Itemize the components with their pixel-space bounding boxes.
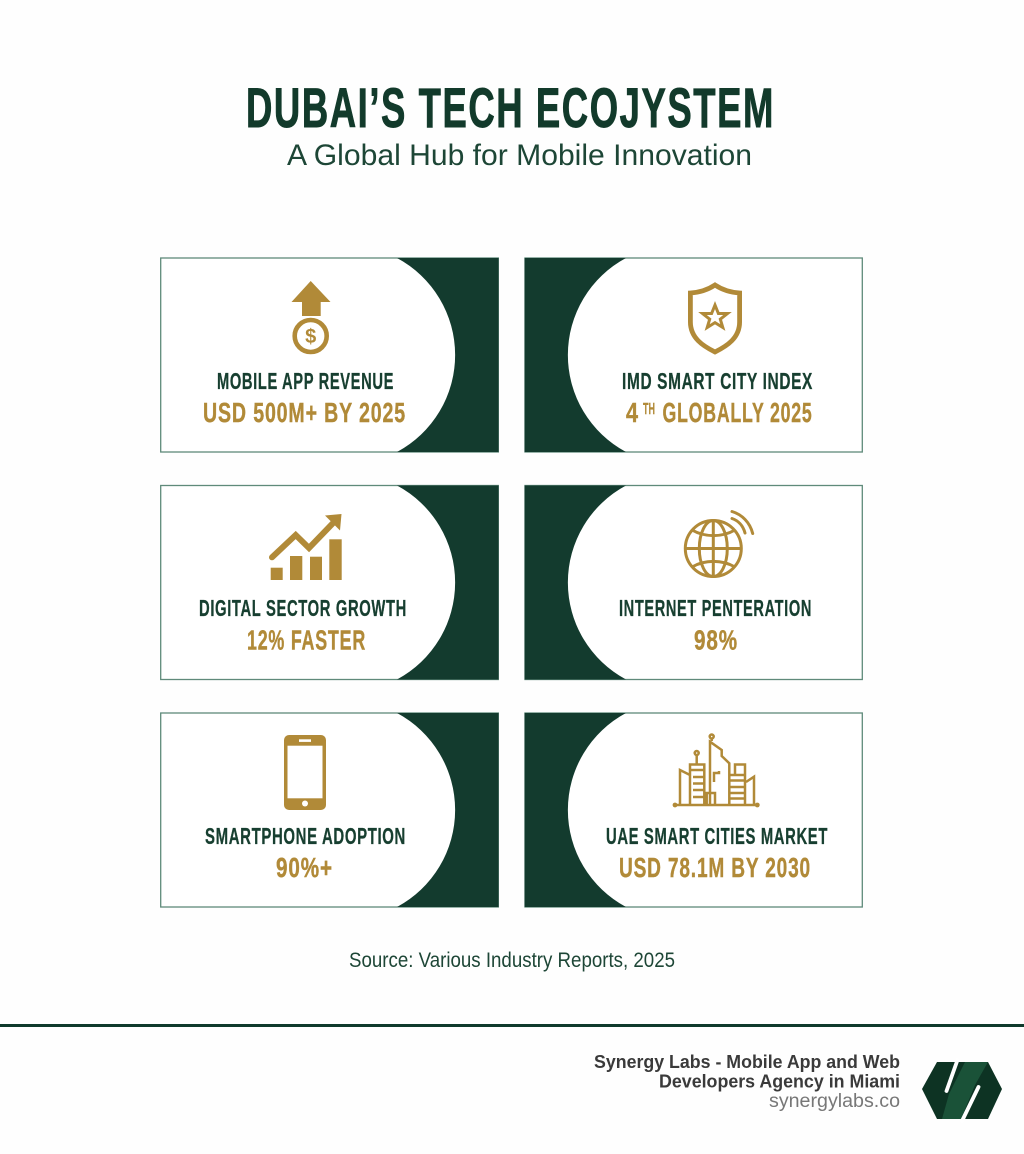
footer text: Developers Agency in Miami — [659, 1072, 900, 1092]
footer text: synergylabs.co — [769, 1091, 900, 1112]
icon: arrow and dollar coin: $ — [305, 326, 316, 348]
icon: smart city skyline — [673, 734, 760, 807]
value: USD 500M+ BY 2025 — [203, 397, 406, 428]
value — [626, 397, 812, 428]
panel: UAE smart cities market — [525, 713, 862, 907]
icon: shield with star — [690, 285, 740, 352]
icon: arrow and dollar coin — [292, 281, 330, 352]
label: MOBILE APP REVENUE — [217, 368, 394, 394]
panel: digital sector growth — [161, 486, 499, 680]
value: 4 — [626, 397, 639, 428]
footer text — [594, 1052, 900, 1112]
subtitle: A Global Hub for Mobile Innovation — [287, 139, 752, 172]
panel: IMD smart city index — [525, 258, 862, 452]
footer rule — [0, 1024, 1024, 1027]
icon: growth chart — [271, 514, 342, 580]
icon: smartphone — [284, 735, 326, 810]
label: SMARTPHONE ADOPTION — [205, 823, 406, 849]
icon: synergy labs logo — [922, 1060, 1002, 1121]
value: GLOBALLY 2025 — [662, 397, 812, 428]
value: 90%+ — [276, 852, 333, 883]
value: 98% — [694, 624, 738, 656]
label: INTERNET PENTERATION — [619, 595, 812, 621]
panel: mobile app revenue — [161, 258, 499, 452]
label: IMD SMART CITY INDEX — [622, 368, 813, 394]
value: USD 78.1M BY 2030 — [619, 852, 811, 883]
icon: globe with signal — [685, 512, 753, 576]
panel: smartphone adoption — [161, 713, 499, 907]
value: TH — [643, 401, 655, 418]
source note: Source: Various Industry Reports, 2025 — [349, 949, 675, 972]
panel: internet penetration — [525, 486, 862, 680]
value: 12% FASTER — [247, 624, 366, 656]
label: UAE SMART CITIES MARKET — [606, 823, 828, 849]
label: DIGITAL SECTOR GROWTH — [199, 595, 407, 621]
footer text: Synergy Labs - Mobile App and Web — [594, 1052, 900, 1072]
